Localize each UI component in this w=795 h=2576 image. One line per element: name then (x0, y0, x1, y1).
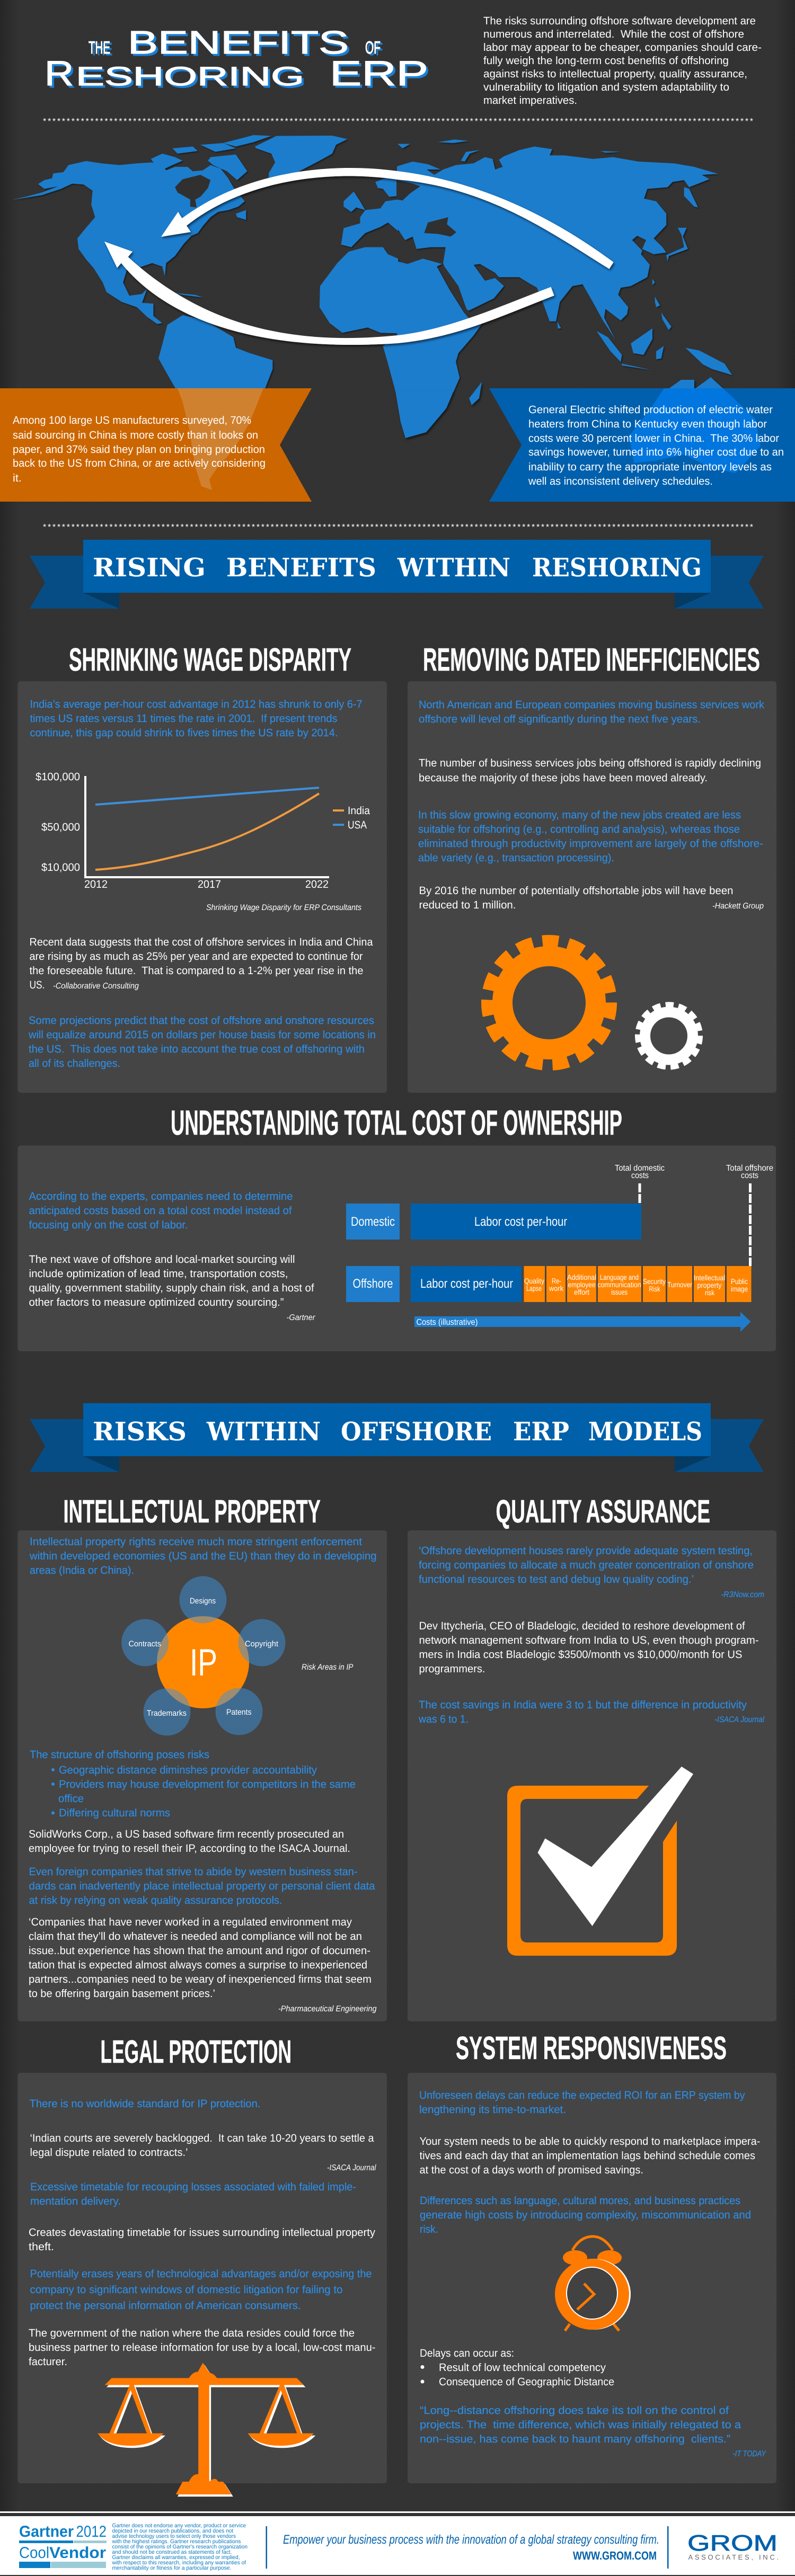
intro text: fully weigh the long-term cost benefits of offshoring (483, 55, 729, 67)
quote: legal dispute related to contracts.’ (30, 2146, 188, 2159)
intro text (483, 15, 762, 106)
text block (30, 2181, 356, 2207)
heading: INTELLECTUAL PROPERTY (64, 1493, 321, 1529)
banner: rising benefits (30, 540, 764, 609)
text block: will equalize around 2015 on dollars per house basis for some locations in (28, 1029, 376, 1041)
disclaimer (112, 2522, 248, 2571)
text block: all of its challenges. (29, 1057, 120, 1069)
offshore row: Additional (567, 1273, 596, 1281)
quote: projects. The time difference, which was initially relegated to a (420, 2419, 741, 2431)
arrows: China to US (104, 168, 614, 345)
title: ESHORING (78, 64, 306, 93)
text block (29, 1866, 375, 1906)
seas cut out of map (175, 175, 456, 237)
text block (418, 1699, 764, 1725)
text block: eliminated through productivity improvement are largely of the offshore- (418, 837, 763, 850)
offshore row: Offshore (353, 1277, 393, 1291)
icon: white gear (639, 1005, 699, 1066)
line chart: 2012 (84, 878, 108, 890)
world map (12, 135, 761, 494)
text block: There is no worldwide standard for IP protection. (30, 2098, 261, 2110)
line chart: $10,000 (41, 861, 80, 873)
bullet list: Delays can occur as: (420, 2347, 514, 2359)
text block: -Hackett Group (712, 902, 764, 911)
banner: rising benefits: RISING (93, 553, 206, 583)
bullet list: Result of low technical competency (439, 2361, 606, 2374)
text block: mers in India cost Bladelogic $3500/month vs $10,000/month for US (419, 1648, 742, 1661)
offshore row: work (549, 1284, 564, 1293)
banner: risks within offshore ERP models: WITHIN (206, 1417, 321, 1447)
panel (408, 1530, 776, 2021)
text block: risk. (420, 2223, 438, 2235)
text block: Dev Ittycheria, CEO of Bladelogic, decided to reshore development of (419, 1620, 745, 1632)
total domestic marker: costs (631, 1171, 649, 1180)
section: quality assurance (408, 1493, 776, 2021)
diagram: IP risk areas: Patents (226, 1708, 251, 1717)
panel (408, 681, 776, 1093)
map: southern lands (178, 377, 761, 494)
offshore row: employee (568, 1280, 596, 1289)
panel (18, 1145, 776, 1351)
text block: company to significant windows of domestic litigation for failing to (30, 2284, 342, 2296)
disclaimer: advise technology users to select only those vendors (112, 2533, 236, 2539)
map: eastern hemisphere (397, 139, 732, 393)
offshore row (346, 1266, 752, 1302)
text block: dards can inadvertently place intellectual property or personal client data (29, 1880, 375, 1892)
text block (30, 936, 373, 991)
line chart: USA (348, 819, 367, 831)
text block: network management software from India to US, even though program- (419, 1634, 759, 1646)
quote: claim that they’ll do whatever is needed and compliance will not be an (29, 1930, 362, 1942)
Indonesia (597, 331, 622, 362)
Novaya Zemlya (461, 150, 480, 162)
diagram: IP risk areas: Contracts (128, 1639, 161, 1648)
text block: the foreseeable future. That is compared to a 1-2% per year rise in the (30, 965, 364, 977)
footer (0, 2511, 795, 2575)
text block (29, 1253, 315, 1322)
offshore row: property (697, 1281, 722, 1289)
chart caption: Shrinking Wage Disparity for ERP Consultants (206, 903, 361, 912)
map: western hemisphere (12, 135, 398, 392)
icon: orange gear (489, 942, 610, 1063)
text block: protect the personal information of American consumers. (30, 2299, 301, 2312)
text block: In this slow growing economy, many of the new jobs created are less (418, 809, 741, 821)
banner: risks within offshore ERP models: MODELS (588, 1417, 702, 1447)
diagram: cost comparison (346, 1164, 773, 1332)
text block: Even foreign companies that strive to abide by western business stan- (29, 1866, 357, 1878)
title: R (47, 56, 76, 95)
offshore row: Re- (552, 1277, 561, 1285)
section: removing dated inefficiencies (408, 641, 776, 1093)
text block: Differences such as language, cultural mores, and business practices (420, 2195, 740, 2207)
title: ESHORING (76, 61, 304, 91)
quote (29, 1916, 377, 2013)
bullet list: Geographic distance diminshes provider accountability (59, 1764, 317, 1776)
text block: reduced to 1 million. (419, 899, 516, 911)
banner: rising benefits: RESHORING (532, 553, 702, 583)
offshore row: Turnover (667, 1280, 692, 1289)
tagline: Empower your business process with the innovation of a global strategy consulting firm. (283, 2533, 659, 2547)
text block (419, 1620, 759, 1675)
text block (29, 1828, 350, 1855)
title: ERP (332, 56, 430, 95)
banner: rising benefits: WITHIN (397, 553, 510, 583)
total offshore marker (726, 1164, 773, 1266)
text block (30, 2268, 372, 2312)
text block: focusing only on the cost of labor. (29, 1219, 188, 1231)
UK and Ireland (343, 192, 365, 212)
line chart: 2017 (198, 878, 221, 890)
Gartner Cool Vendor logo: Vendor (49, 2544, 106, 2562)
section: intellectual property (18, 1493, 387, 2021)
Sakhalin (684, 187, 698, 208)
text block (29, 2327, 375, 2368)
text block: According to the experts, companies need to determine (29, 1190, 293, 1202)
text block: Recent data suggests that the cost of offshore services in India and China (30, 936, 373, 948)
quote: -Pharmaceutical Engineering (278, 2004, 377, 2013)
offshore row: effort (574, 1288, 589, 1296)
text block: mentation delivery. (30, 2195, 121, 2207)
bullet list: office (58, 1793, 84, 1805)
title: R (45, 54, 74, 93)
offshore row: Security (643, 1277, 666, 1286)
Greenland (255, 136, 348, 180)
quote: to be offering bargain basement prices.’ (29, 1987, 215, 2000)
text block: The government of the nation where the data resides could force the (29, 2327, 355, 2339)
text block: was 6 to 1. (418, 1713, 469, 1725)
text block (419, 1545, 764, 1599)
title: ERP (330, 54, 428, 93)
text block: Your system needs to be able to quickly respond to marketplace impera- (420, 2135, 760, 2147)
text block: are rising by as much as 25% per year and are expected to continue for (30, 950, 363, 962)
offshore row: risk (705, 1288, 715, 1297)
text block (419, 2089, 745, 2116)
offshore row: Language and (600, 1273, 639, 1281)
offshore row: issues (611, 1288, 628, 1296)
title: BENEFITS (130, 26, 351, 63)
quote: non--issue, has come back to haunt many offshoring clients.” (420, 2433, 730, 2445)
Philippines (655, 297, 660, 307)
callout: blue ribbon (489, 377, 795, 502)
line chart: India (348, 805, 370, 817)
text block: functional resources to test and debug low quality coding.’ (419, 1573, 694, 1585)
arrow: costs illustrative (414, 1312, 750, 1332)
icon: alarm clock (555, 2236, 631, 2331)
text block: areas (India or China). (30, 1564, 134, 1576)
panel (408, 2073, 776, 2483)
offshore row: Quality (524, 1277, 544, 1285)
domestic row: Domestic (351, 1215, 395, 1229)
line chart (36, 771, 370, 890)
text block: programmers. (419, 1663, 485, 1675)
bullet list (30, 1749, 356, 1819)
text block (419, 699, 765, 725)
banner: rising benefits: BENEFITS (226, 553, 376, 583)
Japan (666, 228, 688, 261)
callout: orange ribbon (0, 388, 312, 502)
diagram: IP risk areas: Copyright (245, 1639, 279, 1648)
panel (18, 1530, 387, 2021)
South America (158, 315, 272, 392)
text: ****************************************************************************************************************************************************** (43, 117, 753, 126)
text block: Creates devastating timetable for issues surrounding intellectual property (29, 2226, 376, 2239)
text block: within developed economies (US and the EU) than they do in developing (29, 1550, 376, 1562)
offshore row: communication (598, 1280, 641, 1289)
text block (29, 1190, 293, 1231)
text block: Unforeseen delays can reduce the expected ROI for an ERP system by (419, 2089, 745, 2101)
disclaimer: with the highest ratings. Gartner research publications (112, 2538, 241, 2545)
intro text: market imperatives. (483, 94, 577, 106)
disclaimer: with respect to this research, including any warranties of (112, 2560, 246, 2566)
text block (419, 885, 764, 911)
intro text: against risks to intellectual property, quality assurance, (483, 68, 747, 80)
text block: The next wave of offshore and local-market sourcing will (29, 1253, 295, 1265)
text block: The number of business services jobs being offshored is rapidly declining (419, 757, 761, 769)
panel (18, 681, 387, 1093)
title: OF (365, 38, 381, 57)
Gartner Cool Vendor logo: 2012 (76, 2523, 107, 2541)
callout: orange ribbon: said sourcing in China is more costly than it looks on (13, 429, 258, 441)
Africa east (397, 259, 482, 393)
text block: at risk by relying on weak quality assurance protocols. (29, 1894, 282, 1906)
Scandinavia (375, 175, 398, 197)
callout: blue ribbon: General Electric shifted production of electric water (528, 404, 773, 416)
text block: suitable for offshoring (e.g., controlling and analysis), whereas those (418, 823, 740, 835)
quote (420, 2404, 766, 2458)
domestic row: Labor cost per-hour (474, 1215, 567, 1229)
intro text: labor may appear to be cheaper, companies should care- (483, 41, 762, 54)
quote: ‘Companies that have never worked in a regulated environment may (29, 1916, 352, 1928)
text block: offshore will level off significantly during the next five years. (419, 713, 701, 725)
intro text: vulnerability to litigation and system adaptability to (483, 81, 729, 93)
text block (28, 1014, 376, 1069)
disclaimer: merchantability or fitness for a particular purpose. (112, 2565, 231, 2571)
callout: blue ribbon: heaters from China to Kentucky even though labor (528, 418, 767, 430)
title (45, 24, 430, 95)
text block: facturer. (29, 2356, 67, 2368)
total domestic marker: Total domestic (615, 1164, 665, 1173)
disclaimer: depicted in our research publications, and does not (112, 2528, 233, 2534)
disclaimer: Gartner disclaims all warranties, expressed or implied, (112, 2554, 240, 2561)
diagram: IP risk areas: Trademarks (147, 1709, 187, 1718)
arrow: costs illustrative: Costs (illustrative) (417, 1318, 478, 1327)
text block: theft. (29, 2241, 54, 2253)
bullet list: Providers may house development for competitors in the same (59, 1778, 356, 1790)
text block: -R3Now.com (721, 1590, 764, 1599)
section: understanding total cost of ownership (18, 1103, 776, 1351)
text block: able variety (e.g., transaction processing). (418, 852, 614, 864)
diagram caption: Risk Areas in IP (302, 1663, 354, 1672)
website: WWW.GROM.COM (573, 2549, 657, 2562)
section: system responsiveness (408, 2030, 776, 2483)
line chart: $100,000 (36, 771, 80, 783)
callout: blue ribbon: costs were 30 percent lower in China. The 30% labor (528, 432, 779, 444)
text block: tives and each day that an implementation lags behind schedule comes (420, 2150, 755, 2162)
title: BENEFITS (128, 24, 349, 60)
text block: Intellectual property rights receive much more stringent enforcement (30, 1536, 362, 1548)
quote: “Long--distance offshoring does take its toll on the control of (420, 2404, 729, 2417)
text block (418, 809, 763, 864)
text block: anticipated costs based on a total cost model instead of (29, 1205, 292, 1217)
GROM logo (687, 2530, 779, 2561)
heading: LEGAL PROTECTION (101, 2034, 292, 2070)
callout: orange ribbon: back to the US from China, or are actively considering (13, 457, 266, 469)
offshore row: Risk (649, 1285, 660, 1293)
text block: include optimization of lead time, transportation costs, (29, 1268, 288, 1280)
text block: -Gartner (286, 1313, 315, 1322)
callout: orange ribbon: paper, and 37% said they plan on bringing production (13, 443, 265, 456)
text block: The cost savings in India were 3 to 1 but the difference in productivity (419, 1699, 747, 1711)
text block: at the cost of a days worth of promised savings. (420, 2164, 643, 2176)
bullet list: The structure of offshoring poses risks (30, 1749, 209, 1761)
text block: the US. This does not take into account the true cost of offshoring with (29, 1043, 365, 1055)
diagram: IP risk areas: IP (190, 1642, 217, 1684)
Western Europe (341, 200, 398, 247)
text block: -Collaborative Consulting (53, 982, 139, 991)
text block: India’s average per-hour cost advantage in 2012 has shrunk to only 6-7 (30, 698, 363, 710)
offshore row: Labor cost per-hour (420, 1277, 513, 1291)
offshore row: Lapse (526, 1284, 542, 1293)
text: ****************************************************************************************************************************************************** (43, 523, 753, 532)
text block (30, 698, 363, 739)
domestic row (346, 1204, 641, 1240)
quote: -ISACA Journal (327, 2163, 376, 2172)
banner: risks within offshore ERP models: RISKS (93, 1417, 187, 1447)
text block: forcing companies to allocate a much greater concentration of onshore (419, 1559, 754, 1571)
quote: tation that is expected almost always comes a surprise to inexperienced (29, 1959, 367, 1971)
callout: orange ribbon: it. (13, 472, 22, 484)
text block: generate high costs by introducing complexity, miscommunication and (420, 2209, 751, 2221)
bullet list: Consequence of Geographic Distance (439, 2376, 614, 2388)
callout: blue ribbon: well as inconsistent delivery schedules. (528, 475, 713, 487)
text block: continue, this gap could shrink to fives times the US rate by 2014. (30, 727, 338, 739)
banner: risks within offshore ERP models: OFFSHORE (341, 1417, 492, 1447)
GROM logo: ASSOCIATES, INC. (688, 2553, 779, 2561)
text block: times US rates versus 11 times the rate in 2001. If present trends (30, 712, 337, 725)
diagram: IP risk areas (121, 1576, 285, 1735)
text block (420, 2195, 751, 2235)
text block: ‘Offshore development houses rarely provide adequate system testing, (419, 1545, 753, 1557)
banner: risks within offshore ERP models: ERP (513, 1417, 569, 1447)
Sri Lanka (557, 322, 561, 328)
text block: US. (30, 979, 45, 991)
heading: SHRINKING WAGE DISPARITY (69, 641, 351, 678)
disclaimer: Gartner does not endorse any vendor, product or service (112, 2522, 246, 2529)
quote: partners...companies need to be weary of inexperienced firms that seem (29, 1973, 372, 1985)
text block (420, 2135, 760, 2176)
line chart: 2022 (305, 878, 329, 890)
offshore row: Public (731, 1277, 748, 1286)
title: THE (91, 39, 112, 59)
section: shrinking wage disparity (18, 641, 387, 1093)
quote (30, 2132, 376, 2172)
West Africa (320, 247, 398, 333)
intro text: numerous and interrelated. While the cost of offshore (483, 28, 744, 40)
text block: because the majority of these jobs have been moved already. (419, 772, 708, 784)
icon: scales (98, 2363, 315, 2497)
text block: employee for trying to resell their IP, according to the ISACA Journal. (29, 1842, 350, 1855)
GROM logo: GROM (687, 2530, 778, 2555)
text block (29, 2226, 376, 2253)
offshore row: Intellectual (694, 1273, 725, 1282)
bullet list (420, 2347, 614, 2388)
Gartner Cool Vendor logo (19, 2523, 107, 2568)
title: OF (367, 39, 383, 59)
quote: -IT TODAY (732, 2449, 766, 2458)
quote: ‘Indian courts are severely backlogged. It can take 10-20 years to settle a (30, 2132, 374, 2144)
panel (18, 2073, 387, 2483)
Gartner Cool Vendor logo: Cool (19, 2544, 49, 2562)
offshore row: image (731, 1285, 748, 1293)
text block: Some projections predict that the cost of offshore and onshore resources (29, 1014, 374, 1027)
text block: -ISACA Journal (714, 1715, 764, 1724)
text block: lengthening its time-to-market. (419, 2103, 566, 2116)
text block: By 2016 the number of potentially offshortable jobs will have been (419, 885, 734, 897)
Gartner Cool Vendor logo: Gartner (19, 2523, 74, 2541)
icon: checkbox (507, 1767, 693, 1956)
text block: Potentially erases years of technological advantages and/or exposing the (30, 2268, 372, 2280)
total domestic marker (615, 1164, 665, 1204)
disclaimer: and should not be construed as statements of fact. (112, 2549, 232, 2555)
text block: SolidWorks Corp., a US based software firm recently prosecuted an (29, 1828, 344, 1840)
callout: blue ribbon: inability to carry the appropriate inventory levels as (528, 461, 772, 473)
line chart: $50,000 (41, 821, 80, 833)
text block (419, 757, 761, 784)
diagram: IP risk areas: Designs (190, 1597, 216, 1606)
banner: risks within offshore ERP models (30, 1403, 764, 1472)
bullet list: Differing cultural norms (59, 1807, 170, 1819)
text block: quality, government stability, supply chain risk, and a host of (29, 1282, 314, 1294)
total offshore marker: Total offshore (726, 1164, 773, 1173)
text block (29, 1536, 376, 1576)
text block: North American and European companies moving business services work (419, 699, 765, 711)
text block: business partner to release information for use by a local, low-cost manu- (29, 2341, 375, 2354)
intro text: The risks surrounding offshore software development are (483, 15, 756, 27)
callout: blue ribbon: savings however, turned into 6% higher cost due to an (528, 446, 784, 458)
quote: issue..but experience has shown that the amount and rigor of documen- (29, 1945, 370, 1957)
title: THE (89, 38, 110, 57)
section: legal protection (18, 2034, 387, 2497)
text block: other factors to measure optimized country sourcing.” (29, 1296, 284, 1308)
callout: orange ribbon: Among 100 large US manufacturers surveyed, 70% (13, 414, 251, 426)
text block: Excessive timetable for recouping losses associated with failed imple- (30, 2181, 356, 2193)
total offshore marker: costs (741, 1171, 758, 1180)
disclaimer: consist of the opinions of Gartner's research organization (112, 2544, 248, 2550)
